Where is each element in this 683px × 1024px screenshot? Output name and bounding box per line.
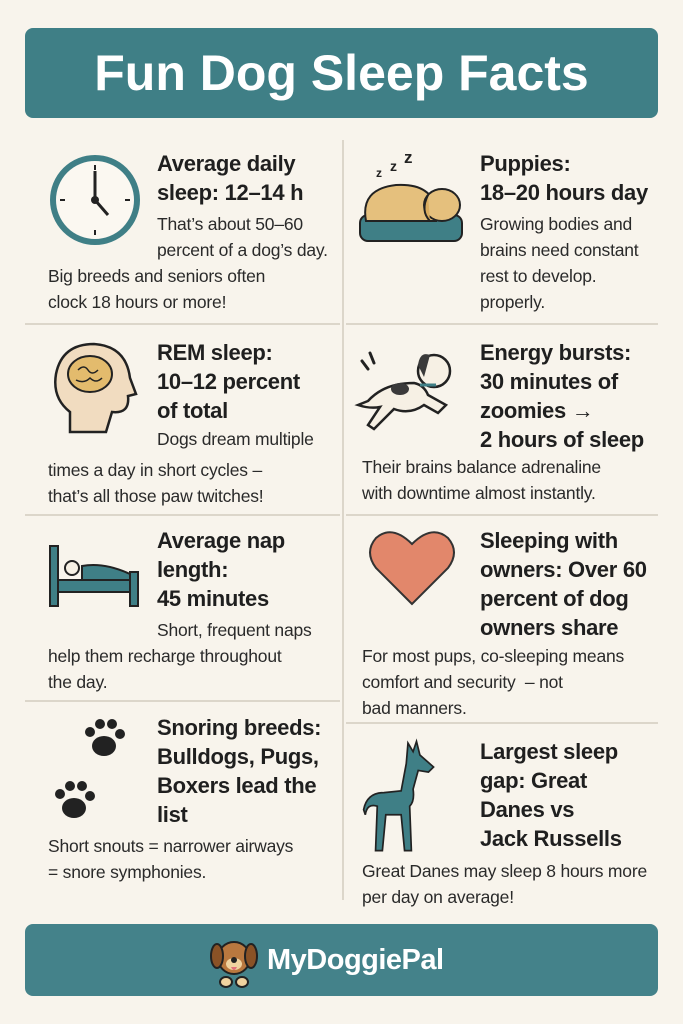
text: Their brains balance adrenaline: [362, 457, 601, 477]
panel: energy bursts: [354, 340, 644, 503]
text: [480, 214, 638, 312]
heading: [157, 340, 300, 423]
panel: REM sleep: [48, 340, 314, 506]
heading: zoomies →: [480, 398, 593, 423]
icon: heart: [369, 531, 455, 606]
icon: dog logo: [210, 941, 258, 988]
panel: average daily sleep: clock 18 hours or more!: [48, 292, 226, 312]
heading: owners: Over 60: [480, 557, 647, 582]
text: Short, frequent naps: [157, 620, 312, 640]
text: For most pups, co-sleeping means: [362, 646, 624, 666]
heading: [480, 739, 622, 851]
panel: nap length: [48, 528, 312, 692]
heading: Boxers lead the: [157, 773, 316, 798]
panel: REM sleep: times a day in short cycles –: [48, 460, 262, 480]
icon: sleeping puppy: z: [390, 158, 397, 174]
text: per day on average!: [362, 887, 514, 907]
heading: 30 minutes of: [480, 369, 618, 394]
heading: Puppies:: [480, 151, 570, 176]
text: [362, 646, 624, 718]
heading: Energy bursts:: [480, 340, 631, 365]
panel: largest sleep gap: [362, 738, 647, 907]
text: properly.: [480, 292, 545, 312]
heading: Largest sleep: [480, 739, 618, 764]
text: [48, 836, 293, 882]
heading: [480, 151, 648, 205]
heading: Average daily: [157, 151, 295, 176]
heading: [157, 528, 285, 611]
title banner: Fun Dog Sleep Facts: [94, 45, 589, 101]
icon: paw prints: [55, 719, 125, 818]
brand name: MyDoggiePal: [267, 944, 444, 976]
heading: Snoring breeds:: [157, 715, 321, 740]
heading: 2 hours of sleep: [480, 427, 644, 452]
icon: running dog: [354, 352, 452, 431]
text: = snore symphonies.: [48, 862, 206, 882]
text: Great Danes may sleep 8 hours more: [362, 861, 647, 881]
heading: [157, 151, 303, 205]
title banner: [25, 28, 658, 118]
heading: length:: [157, 557, 228, 582]
heading: Bulldogs, Pugs,: [157, 744, 319, 769]
panel: average daily sleep: Big breeds and seniors often: [48, 266, 265, 286]
panel: nap length: the day.: [48, 672, 107, 692]
icon: sleeping puppy: [359, 149, 463, 242]
icon: sleeping puppy: z: [376, 166, 382, 180]
heading: [480, 340, 644, 452]
icon: bed: [49, 545, 139, 607]
text: brains need constant: [480, 240, 638, 260]
heading: 18–20 hours day: [480, 180, 648, 205]
heading: 10–12 percent: [157, 369, 300, 394]
heading: [480, 528, 647, 640]
panel: average daily sleep: [48, 151, 328, 312]
icon: head with brain: [54, 342, 138, 434]
text: Short snouts = narrower airways: [48, 836, 293, 856]
text: [157, 214, 328, 260]
text: with downtime almost instantly.: [362, 483, 596, 503]
heading: REM sleep:: [157, 340, 273, 365]
text: percent of a dog’s day.: [157, 240, 328, 260]
heading: sleep: 12–14 h: [157, 180, 303, 205]
panel: REM sleep: that’s all those paw twitches!: [48, 486, 263, 506]
text: bad manners.: [362, 698, 467, 718]
text: comfort and security – not: [362, 672, 563, 692]
heading: list: [157, 802, 188, 827]
text: That’s about 50–60: [157, 214, 303, 234]
text: Growing bodies and: [480, 214, 632, 234]
heading: [157, 715, 321, 827]
heading: Average nap: [157, 528, 285, 553]
panel: puppies: [359, 149, 648, 312]
text: rest to develop.: [480, 266, 596, 286]
heading: 45 minutes: [157, 586, 269, 611]
icon: dog silhouette: [362, 738, 435, 852]
icon: clock: [50, 155, 140, 245]
heading: owners share: [480, 615, 618, 640]
heading: percent of dog: [480, 586, 629, 611]
text: [362, 861, 647, 907]
heading: Danes vs: [480, 797, 574, 822]
heading: of total: [157, 398, 228, 423]
text: Dogs dream multiple: [157, 429, 314, 449]
heading: Sleeping with: [480, 528, 618, 553]
panel: snoring breeds: [48, 715, 321, 882]
heading: Jack Russells: [480, 826, 622, 851]
heading: gap: Great: [480, 768, 587, 793]
panel: nap length: help them recharge throughout: [48, 646, 282, 666]
text: [362, 457, 601, 503]
panel: sleeping with owners: [362, 528, 647, 718]
footer banner: [25, 924, 658, 996]
